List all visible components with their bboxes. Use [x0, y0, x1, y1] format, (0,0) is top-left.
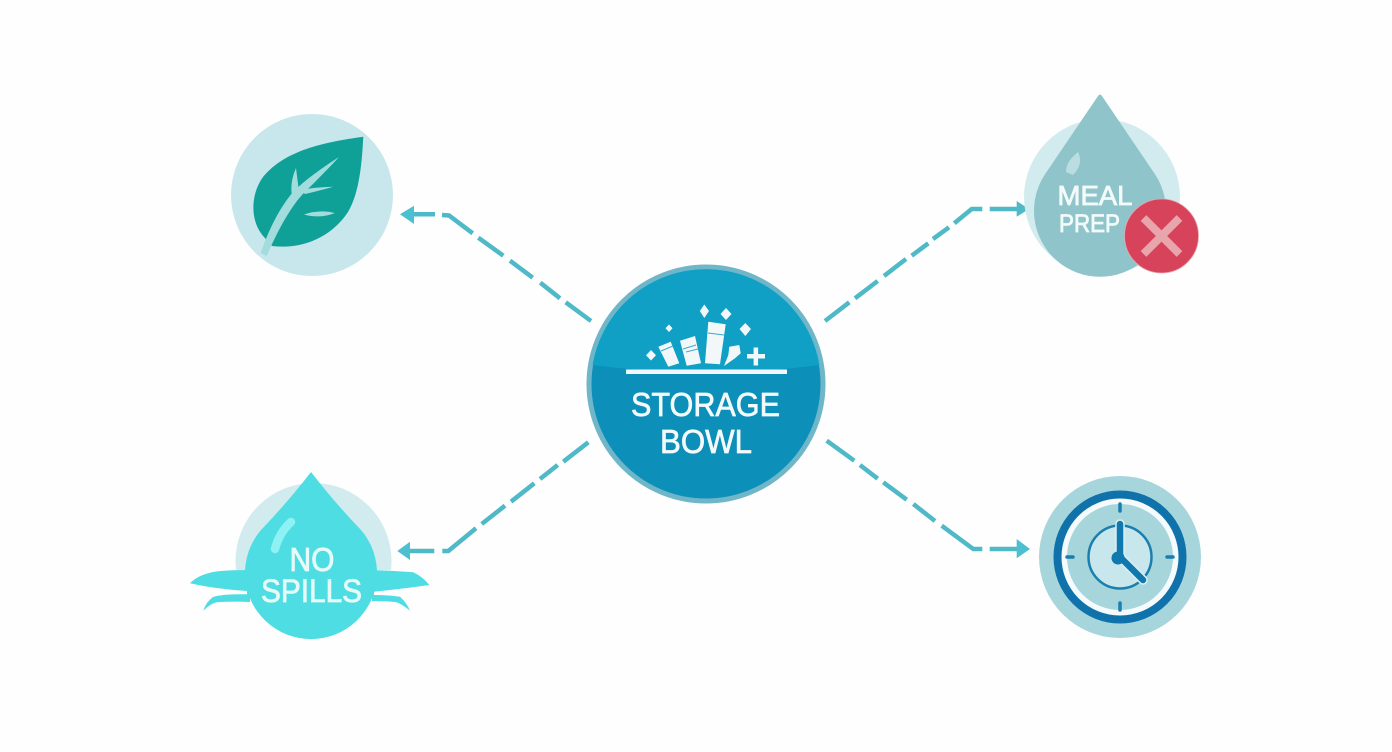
- clock white ring: [1064, 501, 1176, 613]
- icon: no spills drop: [190, 472, 429, 639]
- arrow: center to no spills: [397, 442, 588, 560]
- central hub: storage bowl: BOWL: [660, 423, 752, 460]
- clock dark ring: [1058, 494, 1182, 620]
- icon: storage containers and sparkles: [626, 304, 787, 374]
- icon: no spills drop: SPILLS: [261, 573, 362, 609]
- arrow: center to leaf: [400, 206, 591, 321]
- drop shape: [245, 472, 377, 639]
- central hub: storage bowl: [589, 267, 823, 501]
- ribbons: [190, 570, 250, 611]
- icon: meal prep drop: PREP: [1059, 210, 1120, 238]
- drop label: MEAL: [1058, 180, 1132, 211]
- clock ticks: [1067, 504, 1173, 610]
- drop highlight: [1066, 152, 1080, 175]
- icon: leaf badge: [231, 114, 393, 276]
- arrow: center to clock: [827, 441, 1030, 558]
- icon: clock badge: [1039, 476, 1201, 638]
- leaf veins: [261, 157, 339, 256]
- drop highlight: [275, 522, 291, 549]
- container lid lines: [661, 333, 724, 352]
- drop shape: [1034, 94, 1166, 277]
- arrow: center to meal prep: [825, 201, 1029, 321]
- hub divider shelf: [626, 370, 787, 374]
- drop label: NO: [290, 541, 334, 578]
- leaf shape: [253, 137, 363, 247]
- red x badge: [1124, 199, 1198, 273]
- clock hands: [1120, 524, 1143, 580]
- infographic canvas: [190, 94, 1201, 640]
- hub upper gloss: [593, 269, 819, 372]
- clock face: [1088, 526, 1152, 588]
- icon: meal prep drop: [1024, 94, 1198, 277]
- hub label: STORAGE: [631, 386, 780, 423]
